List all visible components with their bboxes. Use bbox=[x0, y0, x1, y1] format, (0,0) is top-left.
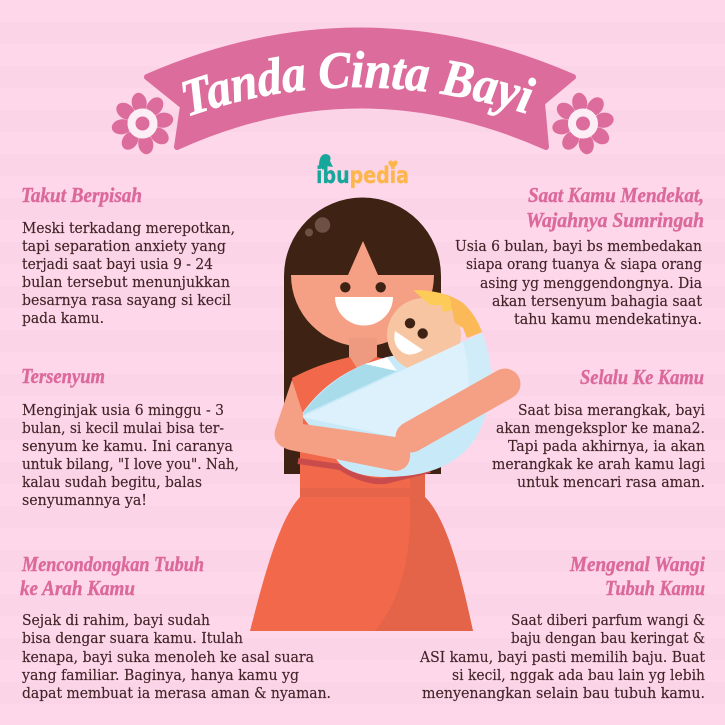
bundle back bbox=[301, 333, 492, 477]
mother right arm bbox=[411, 384, 505, 437]
bundle stripe bbox=[302, 364, 397, 415]
text block bbox=[455, 239, 702, 328]
text block: kenapa, bayi suka menoleh ke asal suara bbox=[22, 650, 314, 666]
mother hair bbox=[284, 198, 441, 474]
panel: selalu ke kamu bbox=[492, 365, 705, 491]
illustration: mother holding baby bbox=[250, 198, 505, 631]
hair highlights bbox=[305, 217, 330, 236]
text block bbox=[22, 221, 235, 327]
text block: si kecil, nggak ada bau lain yg lebih bbox=[452, 668, 705, 684]
heading: Takut Berpisah bbox=[21, 183, 142, 207]
text block: bulan, si kecil mulai bisa ter- bbox=[22, 421, 224, 437]
text block: tahu kamu mendekatinya. bbox=[514, 312, 702, 328]
text block: Tapi pada akhirnya, ia akan bbox=[508, 439, 705, 455]
logo bbox=[316, 154, 409, 189]
text block: kalau sudah begitu, balas bbox=[22, 475, 202, 491]
text block: tapi separation anxiety yang bbox=[22, 239, 226, 255]
panel: mengenal wangi bbox=[419, 552, 705, 702]
panel: saat kamu mendekat bbox=[455, 183, 704, 328]
panel: tersenyum bbox=[21, 364, 239, 509]
heading: Wajahnya Sumringah bbox=[526, 208, 704, 232]
heading: Tersenyum bbox=[21, 364, 105, 388]
text block: ASI kamu, bayi pasti memilih baju. Buat bbox=[419, 650, 705, 666]
baby hair bbox=[413, 290, 482, 338]
text block: baju dengan bau keringat & bbox=[511, 631, 705, 647]
text block: siapa orang tuanya & siapa orang bbox=[466, 257, 702, 273]
neck bbox=[349, 338, 377, 370]
wrap side shade bbox=[463, 333, 491, 408]
logo wordmark: ibupedia bbox=[316, 161, 409, 189]
text block: besarnya rasa sayang si kecil bbox=[22, 293, 231, 309]
icon: logo figure bbox=[319, 154, 333, 170]
heading: Tubuh Kamu bbox=[605, 576, 705, 600]
text block: pada kamu. bbox=[22, 311, 104, 327]
wrap front panel bbox=[302, 333, 491, 437]
text block bbox=[22, 403, 239, 509]
text block: Menginjak usia 6 minggu - 3 bbox=[22, 403, 224, 419]
mother smile bbox=[335, 297, 393, 326]
mother left arm bbox=[275, 380, 410, 471]
title text: Tanda Cinta Bayi bbox=[182, 50, 536, 116]
panel: mencondongkan tubuh bbox=[20, 552, 331, 702]
text block bbox=[492, 403, 705, 491]
icon: logo heart bbox=[388, 160, 398, 169]
text block: akan tersenyum bahagia saat bbox=[492, 294, 702, 310]
text block: bulan tersebut menunjukkan bbox=[22, 275, 230, 291]
text block: merangkak ke arah kamu lagi bbox=[492, 457, 705, 473]
baby head bbox=[387, 298, 461, 372]
text block: Saat diberi parfum wangi & bbox=[511, 613, 705, 629]
icon: left flower bbox=[111, 92, 174, 155]
dress waistband bbox=[300, 488, 410, 497]
text block: untuk mencari rasa aman. bbox=[517, 475, 705, 491]
text block: Meski terkadang merepotkan, bbox=[22, 221, 235, 237]
dress shadow strap bbox=[298, 461, 430, 481]
icon: right flower bbox=[551, 92, 615, 155]
banner ribbon bbox=[147, 30, 573, 147]
text block: terjadi saat bayi usia 9 - 24 bbox=[22, 257, 213, 273]
text block: yang familiar. Baginya, hanya kamu yg bbox=[21, 668, 299, 684]
text block bbox=[21, 613, 331, 702]
text block: untuk bilang, "I love you". Nah, bbox=[22, 457, 239, 473]
panel: takut berpisah bbox=[21, 183, 235, 327]
text block: menyenangkan selain bau tubuh kamu. bbox=[422, 686, 705, 702]
text block: akan mengeksplor ke mana2. bbox=[496, 421, 705, 437]
baby hair highlight bbox=[413, 290, 452, 312]
baby eyes bbox=[405, 318, 428, 339]
baby smile bbox=[394, 331, 423, 355]
mother eyes bbox=[340, 282, 386, 292]
collar bbox=[365, 357, 397, 371]
dress shoulders bbox=[292, 357, 392, 440]
text block: Sejak di rahim, bayi sudah bbox=[22, 613, 210, 629]
text block: senyumannya ya! bbox=[22, 493, 147, 509]
heading: Mengenal Wangi bbox=[569, 552, 705, 576]
text block: bisa dengar suara kamu. Itulah bbox=[22, 631, 243, 647]
heading: Mencondongkan Tubuh bbox=[21, 552, 204, 576]
dress shade panel bbox=[375, 470, 473, 631]
text block: asing yg menggendongnya. Dia bbox=[480, 276, 702, 292]
text block: Usia 6 bulan, bayi bs membedakan bbox=[455, 239, 702, 255]
mother face bbox=[291, 241, 434, 346]
dress skirt bbox=[250, 440, 473, 631]
text block bbox=[419, 613, 705, 702]
title banner bbox=[144, 28, 576, 150]
text block: senyum ke kamu. Ini caranya bbox=[22, 439, 233, 455]
heading: Selalu Ke Kamu bbox=[580, 365, 704, 389]
text block: dapat membuat ia merasa aman & nyaman. bbox=[22, 686, 331, 702]
heading: Saat Kamu Mendekat, bbox=[528, 183, 704, 207]
text block: Saat bisa merangkak, bayi bbox=[518, 403, 705, 419]
heading: ke Arah Kamu bbox=[20, 576, 135, 600]
